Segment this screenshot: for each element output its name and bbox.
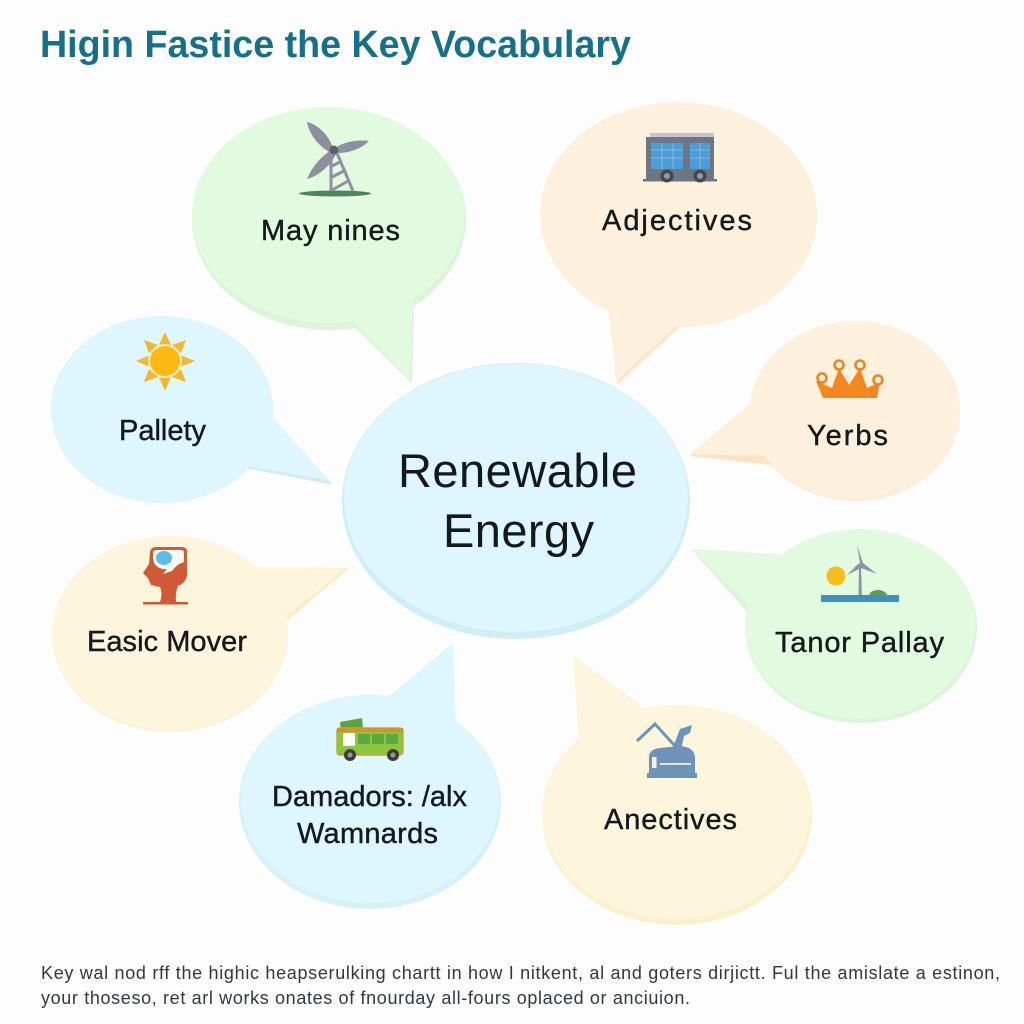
label: Adjectives: Adjectives [602,205,752,237]
label: Easic Mover: Easic Mover [87,626,247,658]
panel: Pallety bubble [51,316,333,503]
label: Damadors /alx: Damadors: /alx [272,781,468,813]
panel: Anectives bubble [542,655,812,925]
icon: green bus [337,718,403,761]
panel: Tanor Pallay bubble [692,529,977,723]
icon: sun [136,332,195,391]
footer line 2: your thoseso, ret arl works onates of fnourday all-fours oplaced or anciuion. [41,988,690,1008]
panel: Adjectives bubble [540,102,817,385]
footer line 1: Key wal nod rff the highic heapserulking chartt in how I nitkent, al and goters dirjictt. Ful the amislate a estinon, [41,963,1000,983]
label: May nines: May nines [261,215,400,247]
icon: wind turbine [299,122,371,196]
title: Higin Fastice the Key Vocabulary [40,24,631,66]
footer text block [41,963,1000,1008]
label: Tanor Pallay: Tanor Pallay [775,627,944,659]
label: Wamnards: Wamnards [297,818,438,850]
heading: Energy: Energy [443,504,594,557]
panel: Easic Mover bubble [52,536,349,732]
icon: solar bus [643,133,717,182]
icon: crane machine [637,724,697,778]
panel: central Renewable Energy ellipse [342,363,690,639]
heading: Renewable: Renewable [398,444,637,497]
label: Yerbs: Yerbs [807,420,888,452]
icon: wind turbine with sun and water [821,545,899,602]
label: Pallety: Pallety [119,415,206,447]
icon: crown [816,360,882,398]
icon: head with brain [143,547,188,604]
panel: Yerbs bubble [690,321,960,501]
panel: Damadors and Wamnards bubble [239,643,501,909]
label: Anectives: Anectives [604,804,737,836]
panel: May nines bubble [192,107,466,383]
